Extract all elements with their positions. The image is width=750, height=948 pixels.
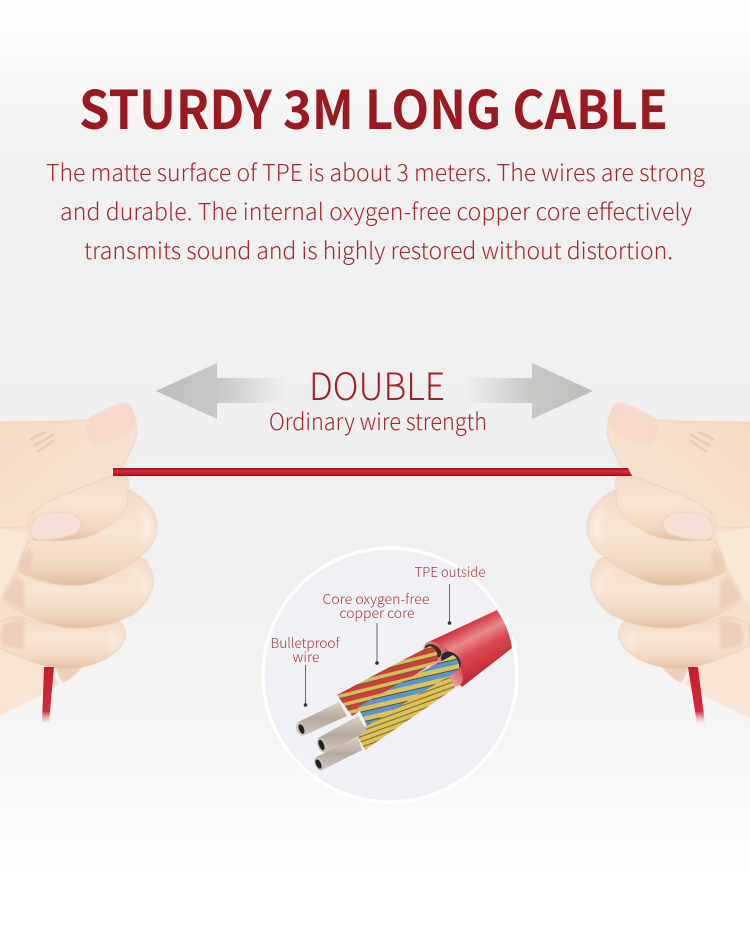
label: bulletproof wire: wire — [292, 646, 320, 666]
hole behind lower strand — [437, 648, 465, 674]
left hand — [0, 403, 157, 720]
left cable end — [42, 667, 54, 722]
leader: bulletproof wire — [304, 665, 307, 707]
label: core oxygen-free copper core: copper core — [340, 602, 414, 622]
arrow: right — [465, 363, 593, 419]
heading: double: DOUBLE — [309, 356, 445, 411]
subheading: ordinary wire strength: Ordinary wire strength — [269, 403, 487, 437]
right cable end — [688, 667, 705, 724]
circle panel — [263, 548, 517, 802]
lower gold strand — [356, 672, 455, 750]
label: core oxygen-free copper core: Core oxygen-free — [322, 588, 430, 608]
label: core oxygen-free copper core — [322, 588, 430, 622]
title: STURDY 3M LONG CABLE — [79, 69, 668, 145]
horizontal red cable — [113, 468, 632, 476]
sheath opening — [416, 635, 470, 693]
label: bulletproof wire: Bulletproof — [270, 632, 340, 652]
description text block: The matte surface of TPE is about 3 meters. The wires are strong — [46, 154, 705, 188]
hole behind upper strand — [422, 641, 444, 661]
right hand — [587, 403, 750, 720]
arrow: left — [156, 363, 285, 419]
label: TPE outside: TPE outside — [414, 561, 486, 581]
description text block: transmits sound and is highly restored without distortion. — [84, 232, 673, 266]
leader: TPE outside — [448, 584, 451, 625]
blue and gold strand — [358, 655, 459, 726]
description text block: and durable. The internal oxygen-free copper core effectively — [60, 193, 692, 227]
leader: copper core — [375, 623, 379, 665]
label: bulletproof wire — [270, 632, 340, 666]
red and gold strand — [337, 646, 438, 716]
red TPE sheath — [425, 610, 512, 687]
description text block — [46, 154, 705, 266]
circular cable detail — [263, 548, 517, 802]
silver wire tips — [294, 702, 367, 772]
